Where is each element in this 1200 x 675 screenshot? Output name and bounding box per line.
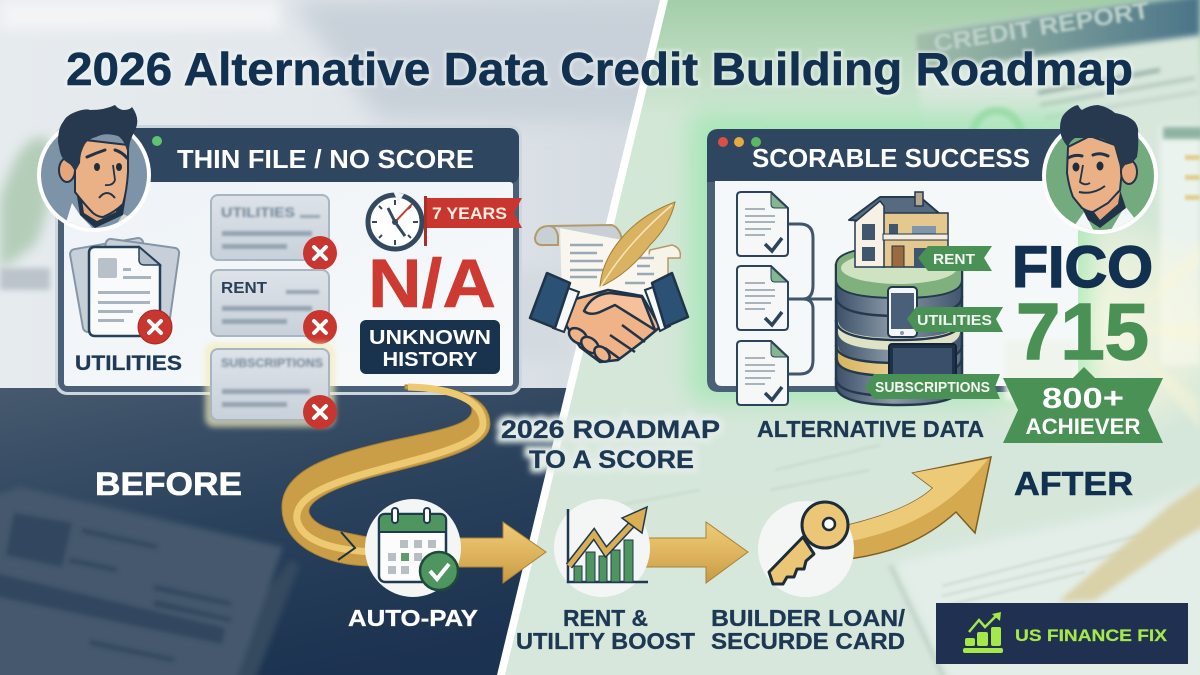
icon: house [849, 192, 948, 268]
window dots [718, 137, 761, 147]
panel: thin file / no score [55, 125, 522, 429]
background: after side: CREDIT REPORT [932, 0, 1152, 58]
panel: scorable success [707, 129, 1078, 405]
unknown history badge: UNKNOWN [369, 327, 491, 349]
icon: x badge documents [138, 310, 172, 344]
label: before: BEFORE [95, 466, 242, 502]
step label: builder loan secured card [711, 605, 906, 654]
background: before side [0, 0, 700, 675]
roadmap heading: TO A SCORE [529, 446, 694, 474]
tag: subscriptions: SUBSCRIPTIONS [875, 380, 990, 396]
icon: document stack [69, 237, 180, 336]
logo: us finance fix: US FINANCE FIX [1015, 626, 1168, 645]
arrow: rising to after [840, 457, 991, 560]
card: rent blurred [211, 270, 337, 344]
step label: builder loan secured card: SECURDE CARD [711, 628, 905, 654]
tag: subscriptions [865, 374, 1000, 399]
arrow: auto-pay to rent boost [370, 522, 546, 583]
icon: broken clock [368, 191, 422, 249]
step icon: growth chart [554, 499, 650, 597]
tag: utilities: UTILITIES [917, 312, 992, 329]
step label: rent and utility boost: UTILITY BOOST [516, 628, 695, 654]
background: after side [480, 0, 1200, 675]
roadmap heading: TO A SCORE [529, 446, 694, 474]
card: utilities blurred: UTILITIES [221, 204, 295, 220]
step icon: gold key [758, 501, 854, 597]
roadmap heading [501, 416, 720, 474]
tag: rent [918, 246, 992, 271]
avatar: worried person [37, 105, 151, 232]
icon: handshake [530, 273, 688, 365]
badge: 800+ achiever: 800+ [1042, 383, 1124, 415]
banner: 7 years [424, 196, 522, 246]
tag: utilities [907, 307, 1003, 332]
window frame [707, 129, 1078, 400]
arrow: rent boost to builder loan [640, 522, 748, 583]
window frame [55, 125, 522, 395]
step icon: calendar auto-pay [365, 499, 461, 597]
badge: 800+ achiever: ACHIEVER [1026, 414, 1141, 439]
arrow: winding gold path [282, 385, 490, 566]
panel heading: THIN FILE / NO SCORE [177, 144, 474, 174]
label: after: AFTER [1014, 465, 1133, 502]
score: fico 715: FICO [1012, 235, 1153, 300]
card: utilities blurred [211, 195, 337, 270]
step label: auto-pay: AUTO-PAY [348, 605, 478, 631]
score: fico 715: 715 [1016, 287, 1149, 376]
documents with checks [737, 192, 788, 405]
badge: 800+ achiever [1003, 367, 1163, 443]
step label: rent and utility boost [516, 605, 695, 654]
label: alternative data: ALTERNATIVE DATA [757, 416, 984, 442]
icon: tablet [889, 344, 956, 384]
banner: 7 years: 7 YEARS [432, 204, 507, 223]
card: subscriptions blurred: SUBSCRIPTIONS [221, 356, 323, 370]
window dot [152, 136, 162, 146]
tag: rent: RENT [933, 251, 975, 268]
label: utilities: UTILITIES [75, 352, 182, 375]
roadmap heading: 2026 ROADMAP [501, 416, 720, 444]
step label: rent and utility boost: RENT & [563, 605, 648, 631]
icon: scroll and quill [535, 202, 680, 300]
title: 2026 Alternative Data Credit Building Roadmap [66, 43, 1133, 95]
diagonal divider [497, 0, 668, 675]
logo: us finance fix [936, 603, 1188, 664]
title: 2026 Alternative Data Credit Building Roadmap [66, 43, 1133, 95]
panel heading: SCORABLE SUCCESS [752, 143, 1030, 173]
icon: database cylinder [836, 247, 962, 405]
avatar: happy person [1042, 105, 1158, 235]
not available score: N/A [368, 245, 496, 322]
icon: phone [888, 287, 917, 337]
card: rent blurred: RENT [221, 280, 267, 297]
roadmap heading: 2026 ROADMAP [501, 416, 720, 444]
step label: builder loan secured card: BUILDER LOAN/ [711, 605, 906, 631]
unknown history badge: HISTORY [382, 349, 478, 371]
score: fico 715 [1012, 235, 1153, 376]
connector lines [788, 224, 832, 374]
card: subscriptions blurred [205, 343, 337, 429]
unknown history badge [360, 320, 500, 374]
